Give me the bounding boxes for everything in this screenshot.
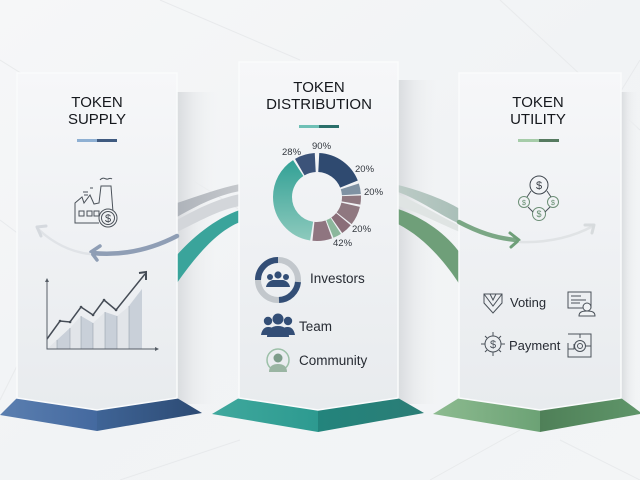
distribution accent bar (299, 125, 339, 128)
donut labels: 20% (355, 164, 375, 175)
icon: token cycle: $ (551, 200, 555, 207)
utility card (459, 73, 621, 410)
label: team: Team (299, 319, 332, 334)
flow ribbons: right (398, 185, 460, 285)
icon: token cycle (518, 176, 558, 220)
icon: payment gear: $ (490, 339, 496, 351)
supply accent bar (77, 139, 117, 142)
panel: token distribution (212, 62, 424, 432)
icon: document with person (568, 292, 595, 316)
icon: secure frame (568, 334, 591, 357)
icon: token cycle: $ (522, 200, 526, 207)
utility title: TOKEN (512, 94, 564, 111)
icon: factory with coin: $ (105, 213, 111, 225)
distribution title: DISTRIBUTION (266, 96, 372, 113)
icon: community (267, 349, 289, 372)
arrow: utility flow (459, 222, 594, 247)
donut labels: 28% (282, 147, 302, 158)
utility accent bar (518, 139, 559, 142)
donut labels: 90% (312, 141, 332, 152)
label: investors: Investors (310, 271, 365, 286)
panel: token utility (433, 73, 640, 432)
icon: token cycle: $ (536, 180, 542, 192)
supply card (17, 73, 177, 410)
icon: payment gear (481, 332, 505, 356)
icon: factory with coin (75, 178, 117, 227)
supply base (0, 398, 202, 431)
donut labels: 42% (333, 238, 353, 249)
icon: token cycle: $ (536, 209, 542, 219)
supply title: SUPPLY (68, 111, 126, 128)
supply title: TOKEN (71, 94, 123, 111)
utility base (433, 398, 640, 432)
area line chart (45, 272, 159, 351)
distribution card (239, 62, 398, 410)
donut labels: 20% (352, 224, 372, 235)
icon: voting shield (484, 294, 502, 313)
icon: team (261, 314, 295, 337)
panel: token supply (0, 73, 202, 431)
donut chart (282, 162, 352, 232)
icon: investors ring (258, 260, 298, 300)
label: voting: Voting (510, 295, 546, 310)
arrow: supply flow (37, 226, 177, 260)
utility title: UTILITY (510, 111, 566, 128)
label: community: Community (299, 353, 368, 368)
donut labels (282, 141, 384, 249)
flow ribbons: left (177, 184, 240, 283)
distribution title: TOKEN (293, 79, 345, 96)
label: payment: Payment (509, 338, 561, 353)
panel shadows (177, 80, 640, 404)
distribution base (212, 398, 424, 432)
donut labels: 20% (364, 187, 384, 198)
